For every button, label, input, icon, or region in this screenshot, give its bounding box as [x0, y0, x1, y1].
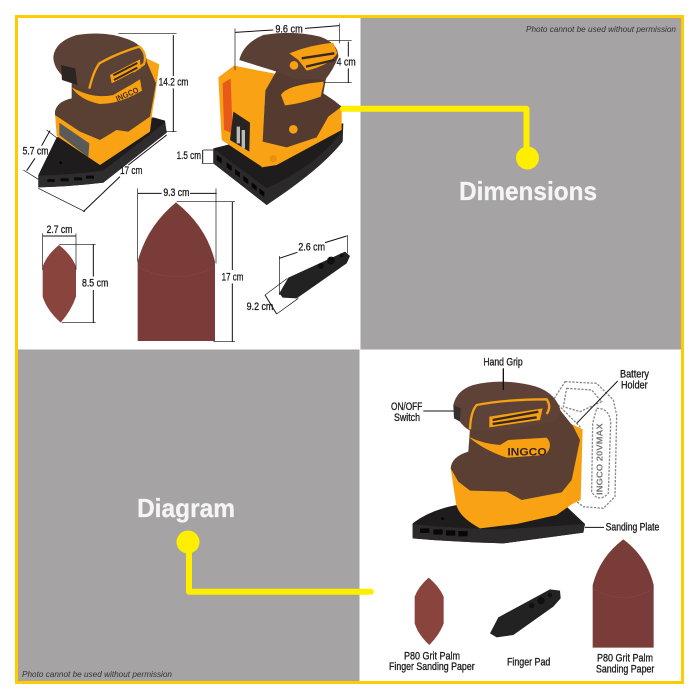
sander front view: INGCO [114, 86, 140, 103]
dimension: 9.6 cm [235, 23, 339, 70]
dimension: 5.7 cm [23, 130, 57, 179]
dimension: 9.2 cm: 9.2 cm [247, 301, 273, 313]
dimension: 2.7 cm [43, 224, 76, 270]
dimension: 9.6 cm: 9.6 cm [275, 24, 303, 36]
label: Finger Pad: Finger Pad [507, 656, 550, 668]
dimension: 17 cm paper: 17 cm [222, 271, 243, 283]
dimension: 4 cm [323, 41, 356, 83]
label: palm sanding paper [596, 652, 655, 675]
heading: Diagram: Diagram [137, 493, 235, 523]
dimension: 14.2 cm [118, 33, 188, 132]
label: Battery Holder: Holder [621, 380, 648, 392]
permission note bottom: Photo cannot be used without permission [22, 669, 172, 679]
label: ON/OFF Switch: Switch [394, 412, 420, 424]
finger pad [279, 252, 350, 298]
label: finger sanding paper [389, 650, 475, 673]
finger sanding paper [43, 245, 76, 323]
sander front view [38, 33, 167, 187]
dimension: 14.2 cm: 14.2 cm [159, 77, 188, 89]
dimension: 17 cm plate: 17 cm [120, 165, 142, 177]
dimension: 17 cm paper [177, 202, 243, 342]
panel: diagram drawings [389, 356, 659, 675]
connector: dimensions [343, 109, 539, 170]
dimension: 9.3 cm [138, 187, 217, 263]
sander body [451, 382, 583, 528]
permission note top: Photo cannot be used without permission [526, 24, 676, 34]
dimension: 9.2 cm [247, 278, 298, 314]
palm sanding paper [593, 539, 654, 648]
heading: Dimensions: Dimensions [459, 176, 597, 206]
dimension: 2.6 cm [279, 235, 347, 295]
panel: diagram background [18, 350, 360, 681]
label: Sanding Plate: Sanding Plate [606, 521, 659, 533]
label: Sanding Plate [585, 521, 659, 533]
connector: diagram [176, 530, 371, 592]
label: palm sanding paper: Sanding Paper [596, 663, 655, 675]
label: Battery Holder: Battery [620, 369, 650, 381]
dimension: 8.5 cm [59, 244, 108, 323]
sanding plate [413, 505, 585, 543]
finger pad [490, 589, 561, 637]
dimension: 5.7 cm: 5.7 cm [23, 145, 48, 157]
sander body: INGCO [507, 446, 547, 458]
label: finger sanding paper: P80 Grit Palm [404, 650, 460, 662]
sander rear view [213, 33, 343, 205]
palm sanding paper [138, 202, 215, 341]
label: Hand Grip: Hand Grip [483, 356, 523, 368]
dimension: 9.3 cm: 9.3 cm [163, 187, 189, 199]
battery outline [553, 382, 617, 508]
dimension: 1.5 cm: 1.5 cm [177, 150, 201, 162]
label: Battery Holder [577, 369, 650, 423]
dimension: 17 cm plate [38, 135, 167, 212]
panel: dimensions background [360, 18, 681, 350]
label: ON/OFF Switch: ON/OFF [391, 401, 423, 413]
battery outline: INGCO 20VMAX [594, 423, 604, 495]
dimension: 2.7 cm: 2.7 cm [47, 224, 72, 236]
label: Hand Grip [483, 356, 523, 390]
dimension: 2.6 cm: 2.6 cm [298, 242, 325, 254]
dimension: 4 cm: 4 cm [337, 57, 356, 69]
dimension: 8.5 cm: 8.5 cm [82, 278, 108, 290]
panel: dimensions drawings [23, 23, 356, 342]
label: palm sanding paper: P80 Grit Palm [597, 652, 653, 664]
label: finger sanding paper: Finger Sanding Paper [389, 661, 475, 673]
label: ON/OFF Switch [391, 401, 454, 424]
finger sanding paper [415, 578, 444, 645]
